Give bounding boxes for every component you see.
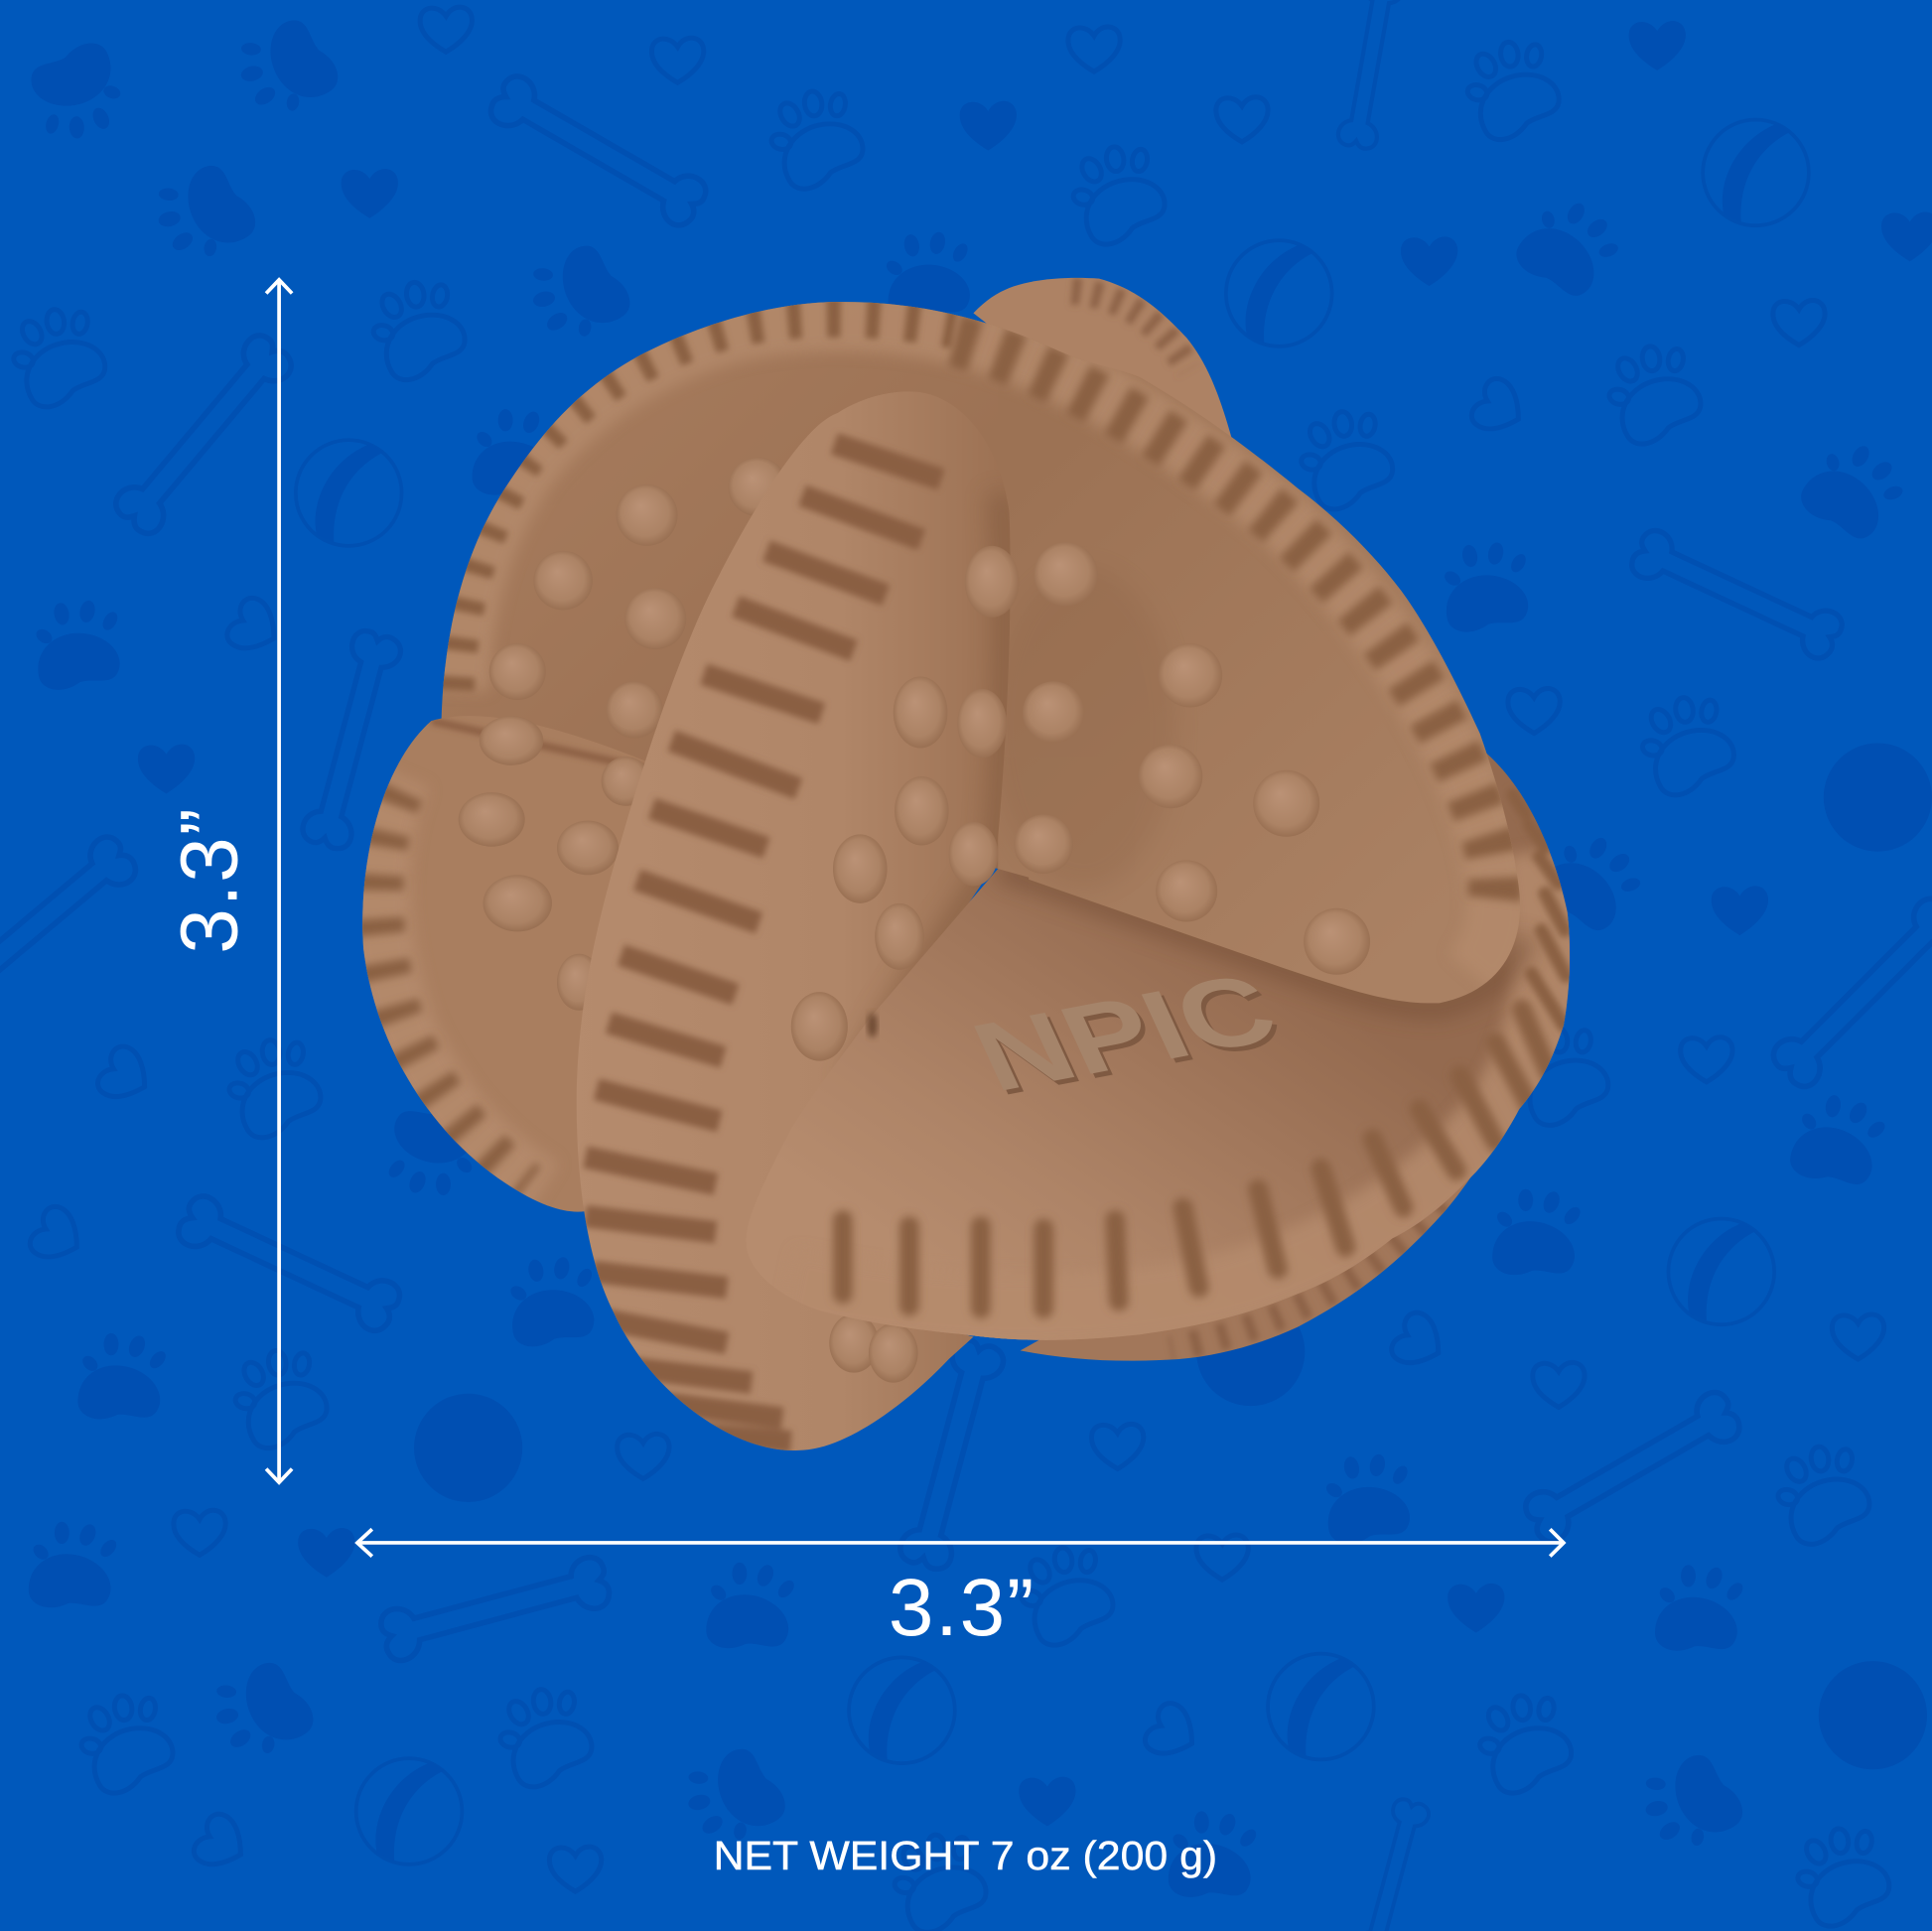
ring side bumps [791,546,1019,1061]
horizontal dimension arrow [357,1529,1564,1557]
right disc bumps [1014,542,1370,975]
width label: 3.3” [889,1563,1034,1653]
vertical dimension arrow [266,280,292,1482]
front disc with ribbed rim [965,753,1571,1340]
shadow where the discs meet [868,1013,878,1037]
upright ribbed ring [567,382,1023,1466]
embossed NPIC logo: NPIC [961,957,1298,1116]
large disc behind the ring with ribbed rim [419,284,1540,1023]
small bumps under the front disc [829,1313,918,1383]
lower left lobe [362,717,643,1212]
back top lobe [973,278,1231,437]
bumps on left discs [459,458,787,1011]
net weight note: NET WEIGHT 7 oz (200 g) [714,1833,1217,1878]
embossed NPIC logo: NPIC [957,953,1293,1112]
front disc tip overlapping the ring [831,869,1029,1340]
product: NPIC chew ball [351,265,1584,1466]
height label: 3.3” [164,808,254,954]
bottom lobe behind the front disc [1021,1177,1471,1361]
